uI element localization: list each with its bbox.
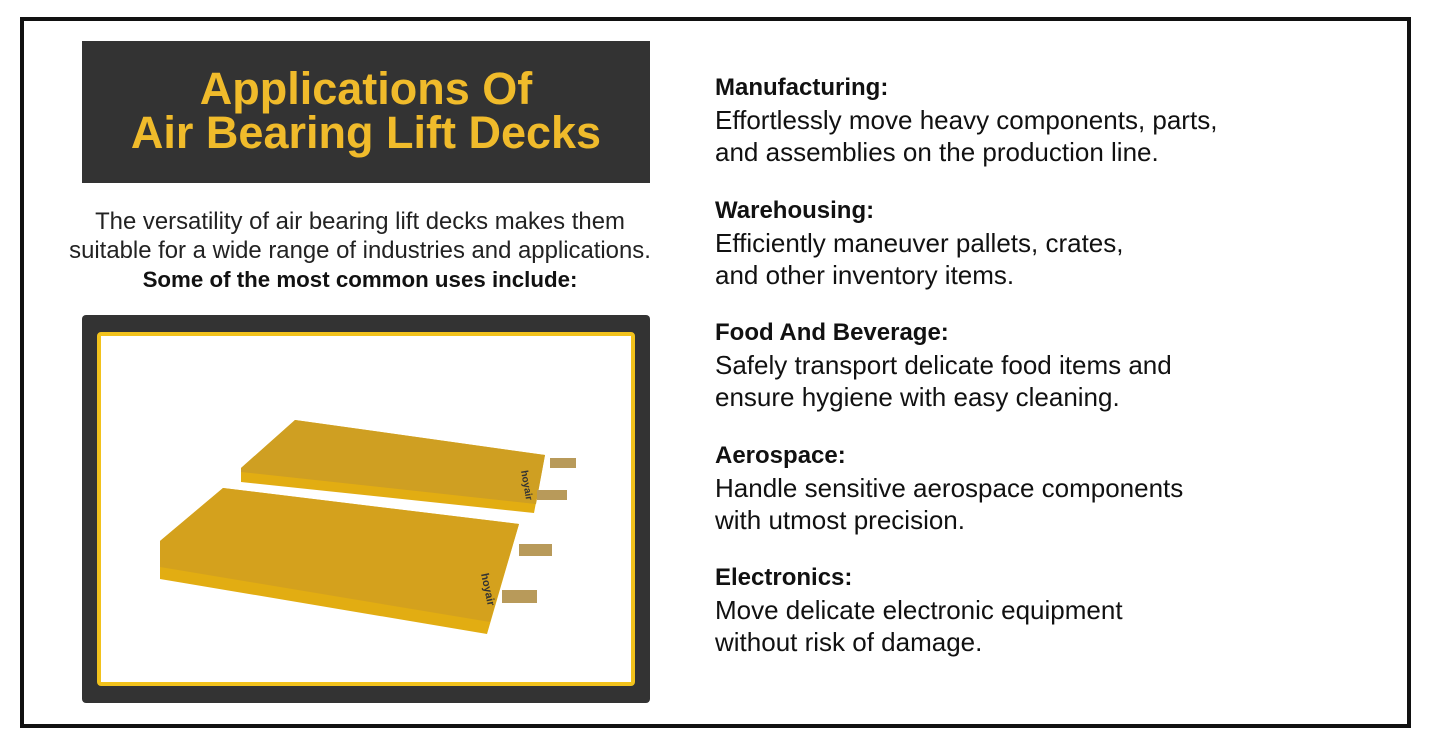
section: electronics: without risk of damage. <box>715 627 982 657</box>
section: electronics: Move delicate electronic equipment <box>715 595 1123 625</box>
section: food and beverage: Safely transport delicate food items and <box>715 350 1172 380</box>
section: food and beverage <box>715 319 1172 412</box>
section: food and beverage: ensure hygiene with easy cleaning. <box>715 382 1120 412</box>
section: manufacturing: and assemblies on the production line. <box>715 137 1159 167</box>
section: warehousing: Warehousing: <box>715 197 874 224</box>
section: manufacturing: Manufacturing: <box>715 74 888 101</box>
intro text: suitable for a wide range of industries and applications. <box>69 237 651 264</box>
section: electronics <box>715 564 1123 657</box>
title <box>82 41 650 183</box>
title: Air Bearing Lift Decks <box>131 107 601 158</box>
section: food and beverage: Food And Beverage: <box>715 319 949 346</box>
title: Applications Of <box>200 63 532 114</box>
section: manufacturing <box>715 74 1217 167</box>
section: warehousing <box>715 197 1123 290</box>
panel: product image <box>82 315 650 703</box>
section: aerospace <box>715 442 1183 535</box>
illustration: lift decks <box>160 420 576 634</box>
section: aerospace: Aerospace: <box>715 442 846 469</box>
section: manufacturing: Effortlessly move heavy components, parts, <box>715 105 1217 135</box>
intro text <box>69 208 651 292</box>
intro text: Some of the most common uses include: <box>143 267 577 292</box>
intro text: The versatility of air bearing lift decks makes them <box>95 208 625 235</box>
illustration: lift decks: hoyair <box>478 572 497 608</box>
section: warehousing: Efficiently maneuver pallets, crates, <box>715 228 1123 258</box>
section: warehousing: and other inventory items. <box>715 260 1014 290</box>
section: aerospace: Handle sensitive aerospace components <box>715 473 1183 503</box>
section: electronics: Electronics: <box>715 564 852 591</box>
illustration: lift decks: hoyair <box>518 470 534 501</box>
section: aerospace: with utmost precision. <box>715 505 965 535</box>
